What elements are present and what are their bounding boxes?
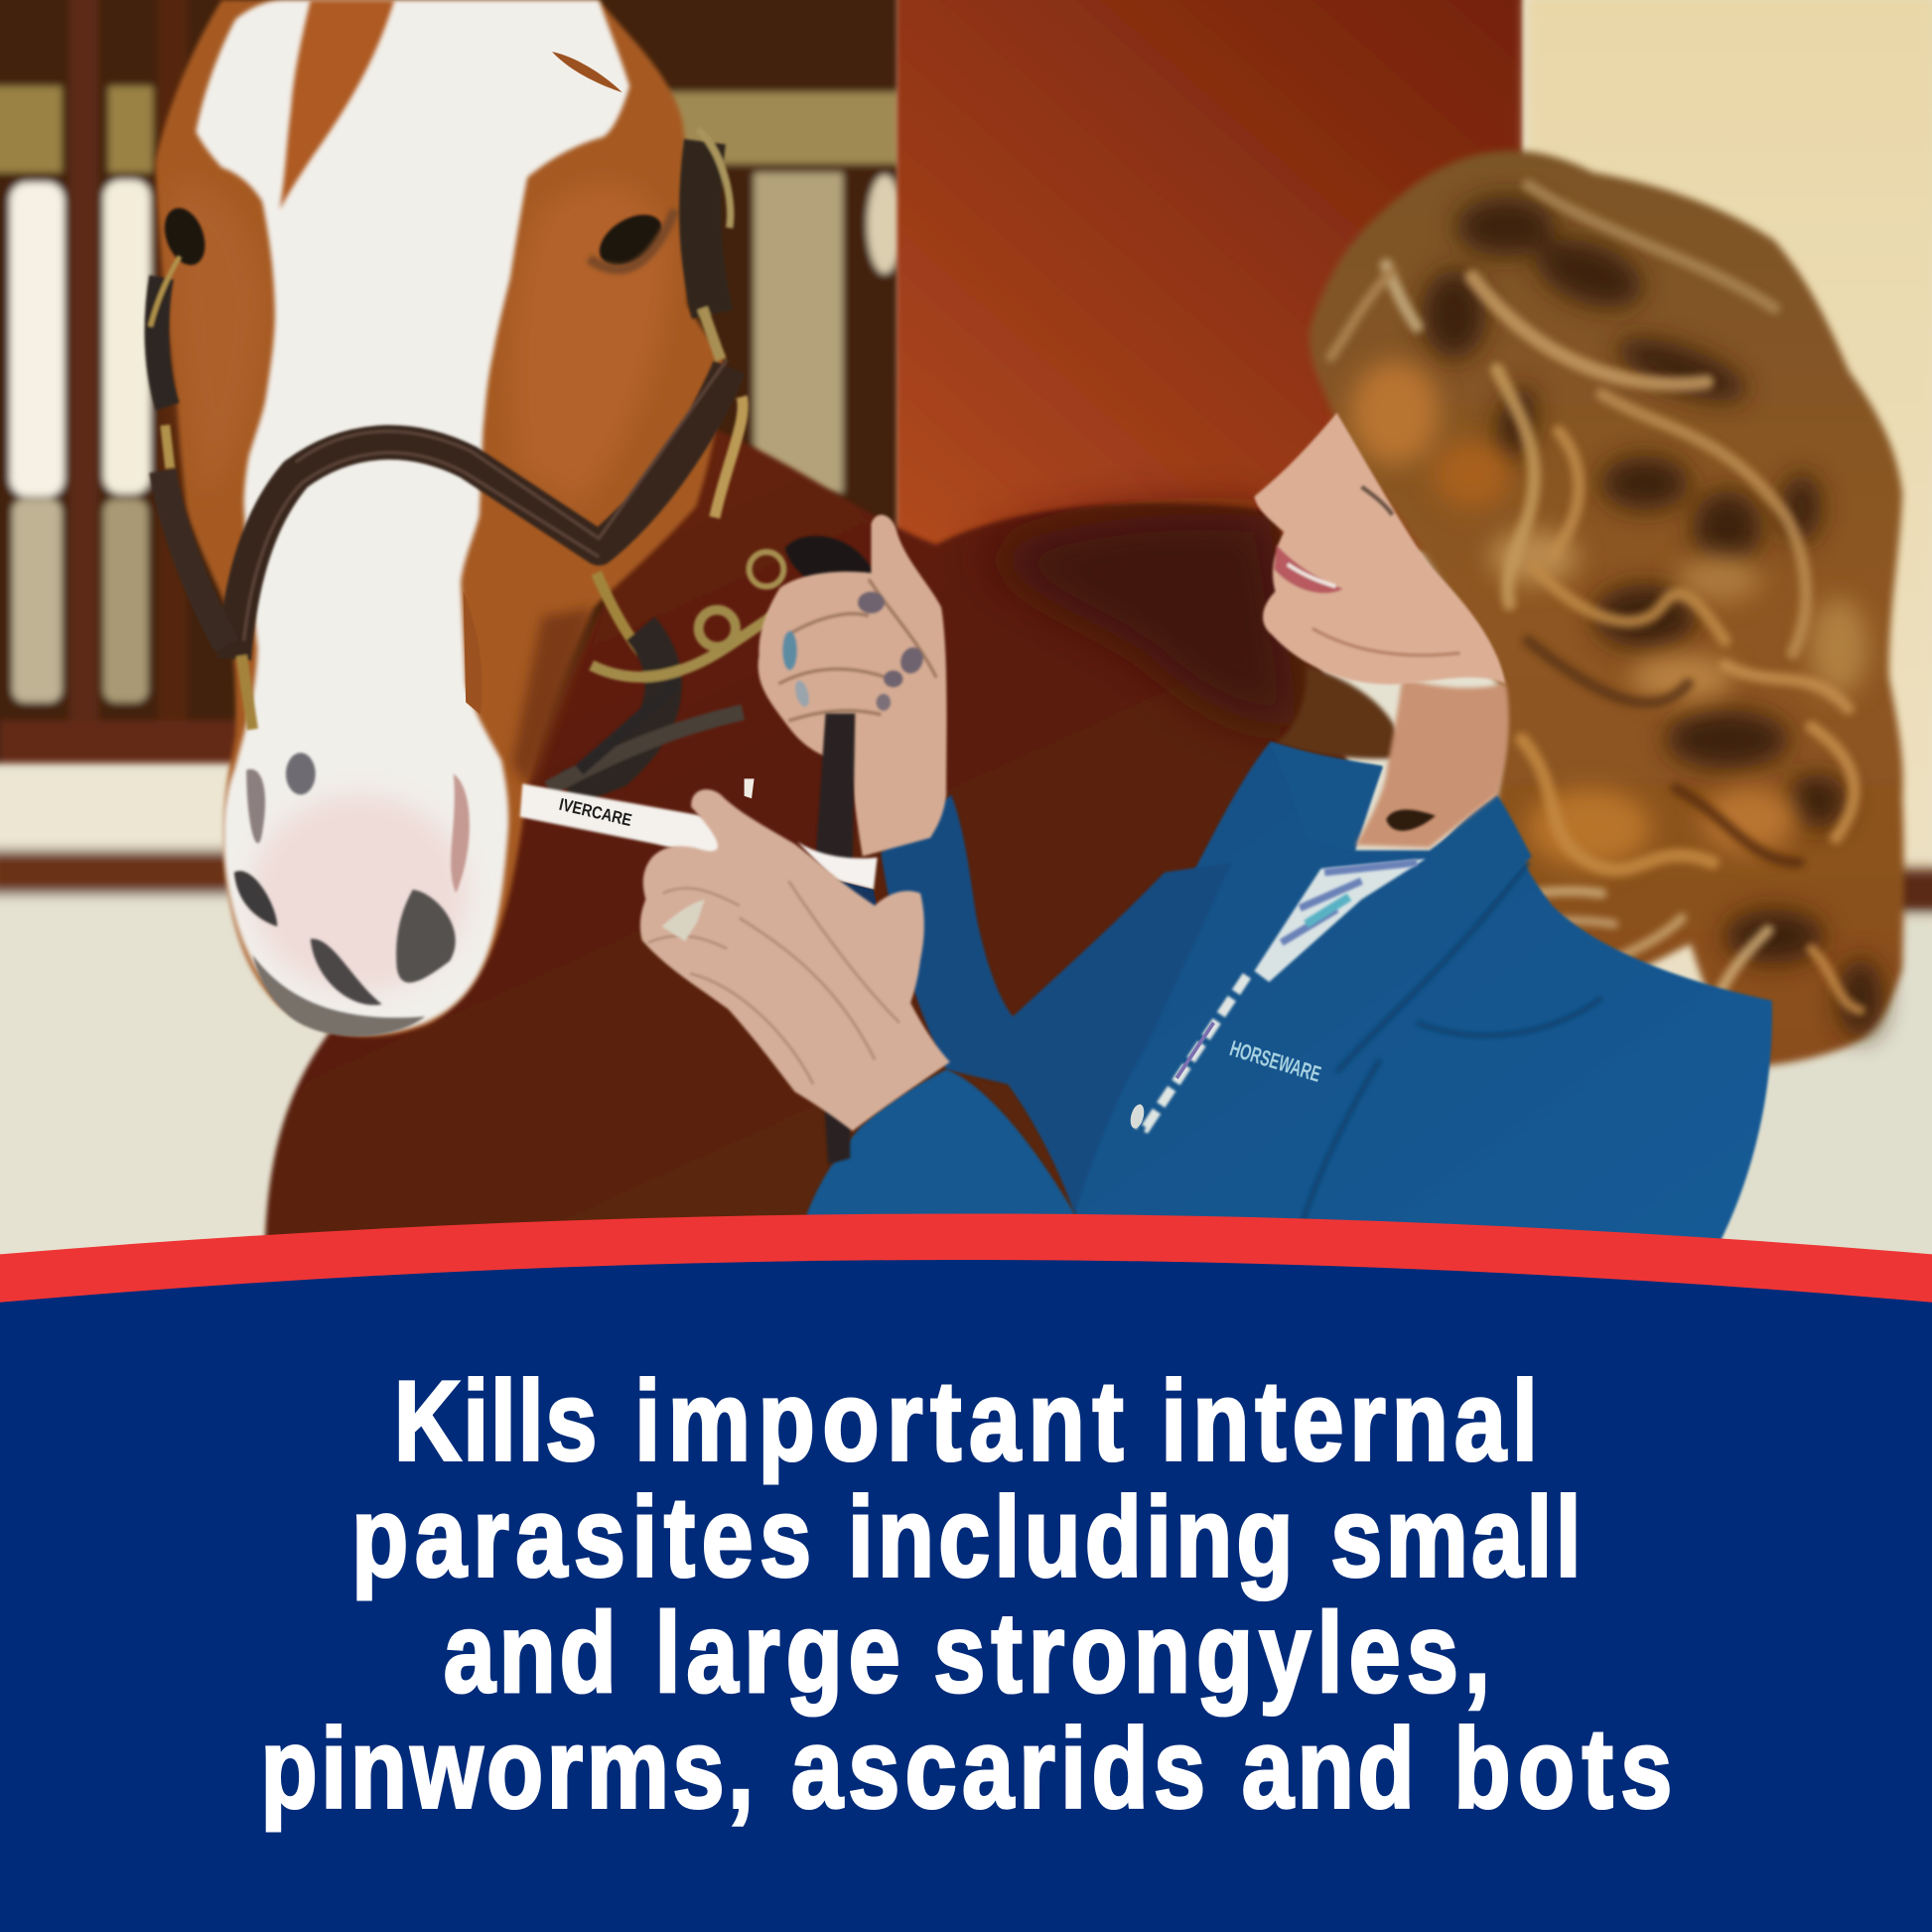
dewormer syringe with IverCare label [520,778,878,909]
leather halter and brass fittings [150,129,813,788]
headline: including [848,1474,1294,1600]
right cuff [807,1069,1074,1244]
stall window with bars [0,0,901,763]
cheek shading [511,184,671,505]
wedding ring [661,899,705,941]
dark hair blobs [1422,198,1882,1037]
horse eyes [157,203,212,271]
headline: internal [1161,1358,1538,1485]
embroidered logo: HORSEWARE [1227,1035,1323,1087]
forelock [280,0,394,209]
headline: and [1242,1706,1415,1833]
orange and golden hair highlights [1350,361,1867,868]
woman's face [1254,413,1506,684]
dewormer syringe with IverCare label: IVERCARE [557,794,633,830]
folds [1297,863,1601,1244]
headline: ascarids [791,1706,1205,1833]
headline: Kills [394,1358,597,1485]
headline: small [1330,1474,1582,1600]
headline [261,1358,1672,1833]
curl strands [1330,185,1861,1011]
collar shadow curl [1386,809,1436,831]
horse head [155,0,724,1036]
noseband [234,367,730,659]
nostrils and muzzle spots [234,753,470,1036]
photo: woman deworming a horse in a stable [0,0,1932,1313]
brass snap [592,589,813,677]
collar [1271,742,1532,918]
headline: parasites [351,1474,811,1600]
lower hand holding syringe [640,789,950,1131]
neck shadow on cheek [511,608,594,788]
woman's blue shirt [807,742,1772,1244]
red arc band [0,1213,1932,1932]
woman's hair [1276,151,1904,1066]
cream right wall [1525,0,1932,1312]
horse body [265,419,1355,1244]
patterned placket [1254,859,1426,982]
white blaze [196,0,629,1034]
button [1128,1103,1147,1130]
headline: pinworms, [261,1706,754,1833]
chestnut flecks in blaze [464,52,622,715]
left cheek straps [163,471,226,645]
stable background [0,0,1932,1313]
lower left wall [0,770,1932,1313]
left sleeve [881,794,1232,1213]
hair mass [1310,151,1904,1066]
lead rope ferrule [785,536,878,582]
headline: bots [1453,1706,1672,1833]
red-orange stall door [897,0,1523,551]
lead rope through hand [816,714,855,863]
head base chestnut [155,0,724,1036]
woman's neck [1355,678,1509,848]
headline: and [444,1589,617,1717]
right cheek strap [700,142,712,314]
navy panel [0,1260,1932,1932]
neck hair wisp [1276,665,1405,759]
straps under jaw [567,628,663,788]
muzzle pink [251,794,469,992]
headline: large [654,1589,900,1717]
dark shoulder shadow [986,513,1300,727]
headline: important [634,1358,1124,1485]
upper hand gripping lead rope [759,515,947,857]
lead rope below hand [823,1084,850,1165]
headline: strongyles, [933,1589,1490,1717]
